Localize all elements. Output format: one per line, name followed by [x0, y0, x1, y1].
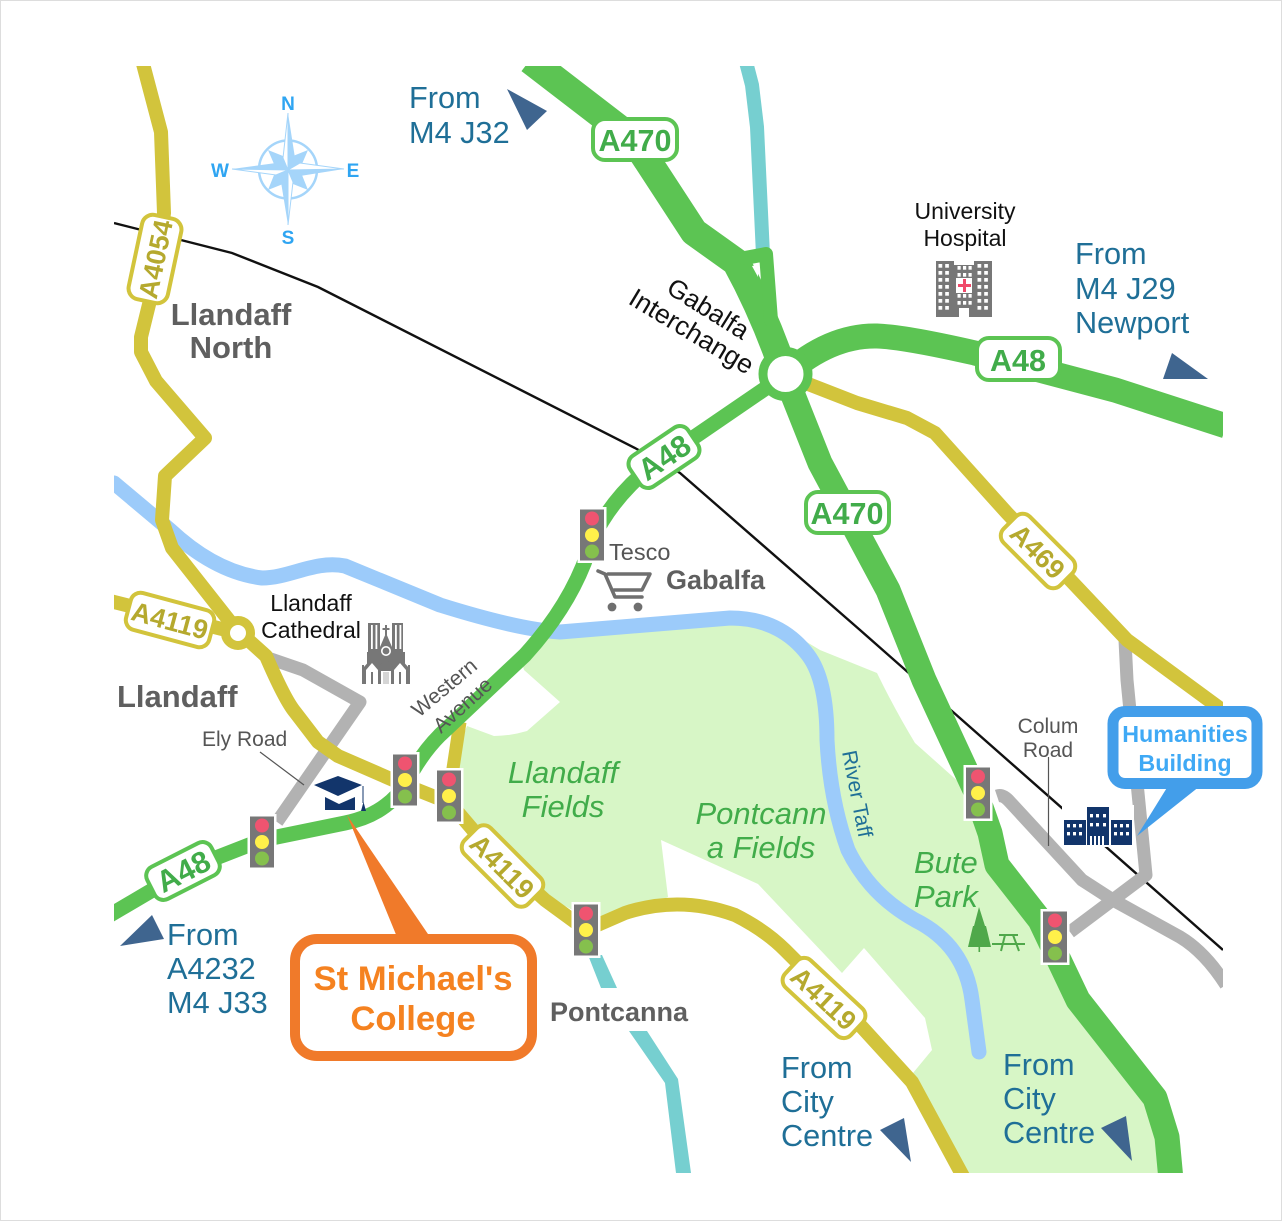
arrow: From A4232 — [120, 915, 164, 946]
roundabout: Llandaff — [226, 620, 250, 646]
label: Llandaff: Llandaff — [117, 679, 238, 714]
traffic light: A4119 junction — [434, 768, 464, 824]
label: Llandaff North: Llandaff — [171, 297, 292, 332]
direction: From City Centre, east: From — [1003, 1047, 1075, 1082]
road: A4119 western arm — [110, 601, 238, 633]
label: Llandaff Fields: Llandaff — [508, 755, 622, 790]
leader: Colum Road — [1048, 757, 1050, 846]
traffic light: Tesco — [578, 507, 606, 563]
compass rose: N — [281, 94, 295, 115]
label: Colum Road: Road — [1023, 739, 1073, 762]
label: River Taff: River Taff — [837, 749, 876, 839]
road sign: A4054: A4054 — [133, 217, 179, 301]
road: A48 east — [785, 336, 1226, 426]
arrow: From M4 J32 — [507, 89, 547, 130]
label: Bute Park: Park — [914, 879, 979, 914]
direction: From City Centre, west: From — [781, 1050, 853, 1085]
icon: university building — [1062, 805, 1134, 847]
callout text: Humanities — [1122, 721, 1248, 747]
callout pointer — [347, 815, 430, 937]
park: green spaces — [450, 620, 1171, 1173]
callout: Humanities Building — [1113, 712, 1257, 836]
traffic light: Pontcanna — [572, 902, 600, 958]
direction: From A4232 M4 J33: M4 J33 — [167, 985, 268, 1020]
callout box — [1113, 712, 1257, 784]
arrow: From Newport — [1163, 353, 1208, 379]
direction: From M4 J29 Newport: M4 J29 — [1075, 271, 1176, 306]
callout text: St Michael's — [313, 960, 513, 998]
label: Pontcanna Fields: Pontcann — [696, 796, 826, 831]
label: Western Avenue: Avenue — [429, 673, 497, 738]
road: A470 slip road — [745, 254, 771, 320]
road: A4054 and A4119 — [141, 60, 965, 1180]
leader: Ely Road — [260, 752, 304, 785]
compass rose: S — [282, 228, 294, 249]
traffic light: Colum Road — [964, 765, 992, 821]
road: Colum Road — [997, 796, 1226, 985]
road sign: A48 south-west — [143, 839, 223, 903]
direction: From A4232 M4 J33: A4232 — [167, 951, 256, 986]
label: Llandaff Fields: Fields — [522, 789, 604, 824]
road sign: A470 north: A470 — [599, 124, 671, 158]
callout text: Building — [1138, 750, 1232, 776]
direction: From M4 J29 Newport: Newport — [1075, 305, 1190, 340]
river: lower teal waterway — [588, 955, 691, 1173]
road: slip road gap — [752, 265, 758, 277]
direction: From M4 J32: M4 J32 — [409, 115, 510, 150]
road: A470 south — [785, 375, 1171, 1180]
label: Colum Road: Colum — [1018, 715, 1078, 738]
traffic light: Ely Road — [248, 814, 276, 870]
callout text: College — [350, 1000, 476, 1038]
road: North Road branch — [1070, 640, 1146, 932]
callout: St Michael's College — [295, 815, 532, 1056]
label: Gabalfa Interchange: Gabalfa — [662, 272, 755, 346]
road sign: A4119 centre: A4119 — [464, 828, 540, 905]
icon: shopping cart — [598, 571, 650, 611]
label: Llandaff Cathedral: Cathedral — [261, 617, 361, 643]
compass rose: W — [211, 161, 229, 182]
road sign: A48 south-west: A48 — [151, 844, 216, 900]
road sign: A470 south: A470 — [811, 497, 883, 531]
direction: From City Centre, east: Centre — [1003, 1115, 1095, 1150]
river: River Taff — [114, 483, 979, 1052]
label: Llandaff North: North — [190, 330, 272, 365]
callout box — [295, 939, 532, 1056]
road: A470 north — [530, 60, 785, 375]
road sign: A48 east: A48 — [990, 344, 1046, 378]
label: Ely Road: Ely Road — [202, 728, 287, 751]
road sign: A48 central: A48 — [632, 428, 697, 488]
label: Bute Park: Bute — [914, 845, 978, 880]
label: Tesco: Tesco — [609, 539, 670, 565]
label: Western Avenue — [407, 654, 497, 738]
road sign: A4119 south: A4119 — [785, 961, 862, 1036]
road: A4119 spur — [452, 722, 460, 775]
label: Pontcanna Fields: a Fields — [707, 830, 815, 865]
direction: From City Centre, east: City — [1003, 1081, 1057, 1116]
compass rose: E — [347, 161, 359, 182]
traffic light: Western Avenue — [390, 752, 420, 808]
label: University Hospital: Hospital — [923, 225, 1007, 251]
label: Pontcanna: Pontcanna — [550, 997, 689, 1027]
road sign: A48 east — [977, 338, 1060, 380]
road: A469 — [785, 375, 1225, 712]
railway line — [114, 223, 1223, 950]
label: Llandaff Cathedral: Llandaff — [270, 590, 352, 616]
road: Ely Road — [268, 658, 360, 822]
icon: cathedral — [362, 623, 410, 684]
label: Gabalfa Interchange: Interchange — [624, 282, 759, 380]
direction: From City Centre, west: City — [781, 1084, 835, 1119]
icon: picnic table — [992, 935, 1025, 951]
compass rose — [211, 94, 359, 249]
arrow: From City Centre, east — [1101, 1116, 1132, 1161]
road: A48 west — [110, 375, 785, 915]
icon: tree — [968, 907, 991, 952]
road sign: A469 — [997, 510, 1079, 592]
callout pointer — [1137, 786, 1200, 836]
label: Gabalfa: Gabalfa — [666, 565, 766, 595]
direction: From A4232 M4 J33: From — [167, 917, 239, 952]
direction: From M4 J32: From — [409, 80, 481, 115]
river: upper teal waterway — [746, 62, 763, 255]
arrow: From City Centre, west — [880, 1118, 911, 1162]
roundabout: Gabalfa Interchange — [763, 352, 808, 396]
icon: graduation cap — [314, 776, 366, 811]
road sign: A4119 west: A4119 — [128, 596, 211, 646]
road sign: A469: A469 — [1004, 518, 1071, 585]
label: Western Avenue: Western — [407, 654, 482, 722]
icon: hospital — [936, 261, 992, 317]
direction: From M4 J29 Newport: From — [1075, 236, 1147, 271]
map roads and park — [110, 60, 1226, 1180]
direction: From City Centre, west: Centre — [781, 1118, 873, 1153]
label: University Hospital: University — [915, 198, 1016, 224]
traffic light: Bute Park — [1040, 909, 1070, 965]
